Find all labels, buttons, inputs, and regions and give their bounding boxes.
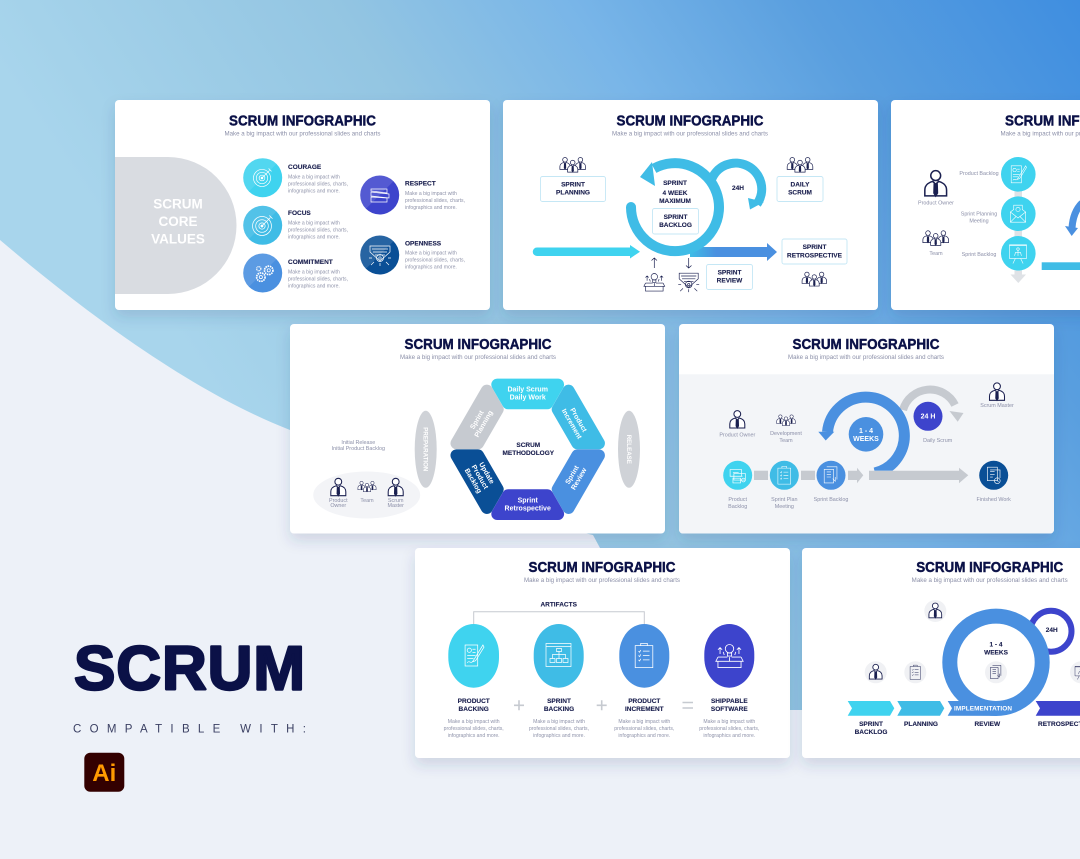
- step labels: SPRINT: [859, 721, 883, 728]
- artifact: shippable software: Make a big impact with: [703, 719, 755, 725]
- artifact: product backing: [444, 624, 504, 739]
- label: sprint review: Review: [570, 467, 589, 491]
- sprint planning box: SPRINT: [561, 182, 585, 188]
- artifact: shippable software: SHIPPABLE: [711, 698, 748, 705]
- roles ellipse: [313, 472, 420, 518]
- scrum master: [980, 383, 1014, 409]
- arrow: gray long: [869, 468, 968, 483]
- value: respect: infographics and more.: [405, 205, 457, 211]
- chevron: sprint backlog: [848, 701, 894, 716]
- value: commitment: professional slides, charts,: [288, 277, 348, 283]
- step: sprint backlog: [814, 461, 848, 503]
- sprint backlog box: SPRINT: [664, 214, 687, 221]
- subtitle: Make a big impact with our professional slides and charts: [788, 354, 944, 361]
- 24h circle: [914, 402, 942, 431]
- sprint retrospective box: [782, 239, 847, 264]
- daily scrum label: Daily Scrum: [923, 438, 953, 444]
- team: [923, 231, 949, 257]
- title: SCRUM INFOGRAPHIC: [616, 114, 764, 130]
- label: sprint retrospective: Retrospective: [505, 505, 551, 512]
- value: openness: professional slides, charts,: [405, 258, 465, 264]
- subtitle: Make a big impact with our professional slides and charts: [224, 130, 380, 138]
- artifact: product backing: Make a big impact with: [448, 719, 500, 725]
- panel: roles and flow, cropped: [891, 100, 1080, 310]
- roles ellipse: Product: [329, 498, 348, 504]
- 24h circle: 24 H: [921, 414, 935, 421]
- icon: team: [802, 272, 827, 286]
- daily scrum box: [777, 176, 823, 202]
- step: sprint planning meeting: [961, 196, 1036, 231]
- title: SCRUM INFOGRAPHIC: [229, 114, 376, 130]
- value: focus: professional slides, charts,: [288, 228, 348, 234]
- sprint review box: [706, 264, 752, 290]
- product owner: Product Owner: [918, 201, 954, 207]
- product owner: [918, 171, 954, 207]
- arrow: output blue: [690, 243, 777, 261]
- step: sprint backlog: [962, 236, 1036, 271]
- value: focus: FOCUS: [288, 210, 311, 217]
- artifact: shippable software: [699, 624, 759, 739]
- team: Team: [929, 251, 943, 257]
- segment: sprint planning: [456, 391, 503, 453]
- artifact: sprint backing: professional slides, charts,: [529, 726, 589, 732]
- artifact: sprint backing: SPRINT: [547, 698, 571, 705]
- plus sign: [514, 700, 524, 710]
- artifact: product backing: infographics and more.: [448, 733, 500, 739]
- arrow: cyan bar: [1042, 262, 1080, 270]
- sprint label: SPRINT: [663, 180, 687, 187]
- sprint planning box: PLANNING: [556, 190, 590, 197]
- sprint retrospective box: RETROSPECTIVE: [787, 252, 843, 259]
- step: sprint plan meeting: Sprint Plan: [771, 497, 797, 503]
- 24h label: 24H: [732, 185, 744, 192]
- connector arrows: [754, 468, 863, 483]
- step: finished work: [977, 461, 1011, 503]
- weeks circle: WEEKS: [853, 436, 879, 443]
- sprint planning box: [540, 176, 606, 202]
- panel: scrum methodology hexagon: [290, 324, 665, 534]
- sprint backlog box: [652, 208, 698, 234]
- artifact: shippable software: professional slides, charts,: [699, 726, 759, 732]
- segment: daily scrum: [497, 385, 558, 403]
- icon: team: [787, 157, 813, 172]
- value: courage: [243, 158, 348, 197]
- sprint label: [659, 180, 691, 205]
- artifact: product increment: Make a big impact with: [618, 719, 670, 725]
- label: sprint review: Sprint: [565, 464, 581, 486]
- step: product backlog: Backlog: [728, 504, 747, 510]
- connectors: [1014, 190, 1022, 238]
- value: respect: professional slides, charts,: [405, 198, 465, 204]
- arrow: gray down: [1010, 270, 1026, 283]
- center label: SCRUM: [516, 442, 540, 449]
- artifact: sprint backing: infographics and more.: [533, 733, 585, 739]
- sprint backlog box: BACKLOG: [659, 222, 692, 229]
- core values half circle: VALUES: [151, 232, 205, 246]
- value: courage: COURAGE: [288, 164, 322, 171]
- step: sprint planning meeting: Sprint Planning: [961, 212, 997, 218]
- value: openness: infographics and more.: [405, 265, 457, 271]
- segment: update product backlog: [456, 446, 503, 508]
- value: commitment: [243, 253, 348, 292]
- artifacts bracket: ARTIFACTS: [540, 602, 578, 608]
- release ellipse: [618, 411, 640, 488]
- background light curved area: [0, 240, 1080, 859]
- panel: sprint flow: [679, 324, 1054, 534]
- title: SCRUM INFOGRAPHIC: [792, 337, 940, 353]
- value: openness: OPENNESS: [405, 240, 442, 248]
- sprint review box: SPRINT: [718, 270, 741, 277]
- icon bubble: owner: [924, 600, 946, 622]
- chevron: planning: [897, 701, 944, 716]
- value: courage: infographics and more.: [288, 189, 340, 195]
- sprint retrospective box: SPRINT: [803, 244, 826, 251]
- 24h ring: 24H: [1046, 627, 1058, 634]
- value: openness: [360, 235, 465, 274]
- product owner: [719, 411, 755, 439]
- icon: medal: [678, 273, 699, 292]
- step labels: BACKLOG: [855, 729, 887, 736]
- subtitle: Make a big impact with our professional slides and charts: [524, 577, 680, 584]
- release ellipse: RELEASE: [625, 435, 632, 464]
- artifact: product increment: infographics and more.: [618, 733, 670, 739]
- artifact: product backing: professional slides, charts,: [444, 726, 504, 732]
- icon: up arrow: [652, 258, 657, 268]
- icon: down arrow: [686, 258, 692, 268]
- label: product increment: Increment: [560, 408, 583, 441]
- daily scrum box: SCRUM: [788, 190, 812, 197]
- center label: METHODOLOGY: [502, 450, 555, 457]
- development team: Team: [779, 438, 793, 444]
- panel: scrum core values: [115, 100, 490, 310]
- step: finished work: Finished Work: [977, 497, 1011, 503]
- step: sprint backlog: Sprint Backlog: [814, 497, 848, 503]
- hexagon ring: [456, 385, 599, 514]
- panel: sprint cycle: [503, 100, 878, 310]
- value: focus: infographics and more.: [288, 235, 340, 241]
- core values half circle: [115, 157, 236, 294]
- artifact: product increment: professional slides, charts,: [614, 726, 674, 732]
- segment: sprint review: [552, 446, 599, 508]
- gray content area: [679, 374, 1054, 534]
- arrow: sprint circle: [626, 162, 719, 251]
- step: sprint plan meeting: [770, 461, 799, 510]
- icon bubble: clipboard: [904, 661, 926, 683]
- roles ellipse: Owner: [330, 503, 346, 509]
- value: courage: Make a big impact with: [288, 175, 340, 181]
- label: update product backlog: Update: [477, 461, 495, 485]
- arrow: gray 24h: [903, 390, 964, 422]
- value: openness: Make a big impact with: [405, 251, 457, 257]
- step: sprint backlog: Sprint Backlog: [962, 252, 996, 258]
- step: product backlog: Product: [728, 497, 747, 503]
- value: respect: Make a big impact with: [405, 191, 457, 197]
- scrum master: Scrum Master: [980, 403, 1014, 409]
- artifact: sprint backing: BACKING: [544, 706, 574, 713]
- development team: [770, 415, 802, 444]
- value: focus: Make a big impact with: [288, 221, 340, 227]
- arrow: input cyan: [533, 245, 640, 258]
- weeks circle: 1 - 4: [859, 428, 873, 435]
- weeks ring: [950, 616, 1042, 708]
- value: commitment: infographics and more.: [288, 284, 340, 290]
- core values half circle: CORE: [158, 214, 198, 229]
- chevron: retrospective: [1036, 701, 1080, 716]
- step: product backlog: [723, 461, 752, 510]
- label: sprint planning: Planning: [474, 410, 495, 439]
- arrow: blue weeks: [818, 397, 904, 473]
- heading: SCRUM: SCRUM: [74, 634, 305, 704]
- value: commitment: Make a big impact with: [288, 270, 340, 276]
- artifact: product increment: INCREMENT: [625, 706, 664, 713]
- chevron: implementation: [948, 701, 996, 716]
- artifact: sprint backing: [529, 624, 589, 739]
- initial release text: Initial Release: [341, 440, 375, 446]
- daily scrum box: DAILY: [791, 182, 810, 188]
- artifact: shippable software: SOFTWARE: [711, 706, 748, 713]
- text: compatible with: COMPATIBLE WITH:: [73, 724, 306, 736]
- preparation ellipse: [415, 411, 437, 488]
- sprint label: MAXIMUM: [659, 198, 691, 205]
- step: sprint plan meeting: Meeting: [775, 504, 794, 510]
- implementation label: IMPLEMENTATION: [954, 706, 1012, 713]
- segment: product increment: [552, 391, 599, 453]
- weeks ring: WEEKS: [984, 650, 1009, 656]
- step: product backlog: [959, 157, 1036, 192]
- label: update product backlog: Backlog: [463, 468, 482, 495]
- sprint label: 4 WEEK: [663, 190, 688, 197]
- initial release text: Initial Product Backlog: [332, 446, 385, 452]
- segment: sprint retrospective: [497, 495, 558, 514]
- panel: implementation timeline, cropped: [802, 548, 1080, 758]
- sprint review box: REVIEW: [717, 278, 743, 285]
- equals sign: [682, 702, 693, 708]
- label: sprint planning: Sprint: [469, 409, 486, 431]
- subtitle: Make a big impact with our professional slides and charts: [400, 354, 556, 361]
- step: sprint planning meeting: Meeting: [969, 219, 989, 225]
- label: daily scrum: Daily Scrum: [507, 387, 548, 394]
- icon: Adobe Illustrator: Ai: [92, 760, 116, 787]
- value: commitment: COMMITMENT: [288, 259, 333, 266]
- roles ellipse: Scrum: [388, 498, 404, 504]
- artifact: product backing: PRODUCT: [458, 698, 490, 705]
- 24h ring: [1030, 611, 1072, 652]
- arrow: 24h loop: [711, 163, 764, 210]
- arrow: blue curved: [1065, 203, 1080, 236]
- weeks ring: 1 - 4: [989, 642, 1003, 648]
- value: courage: professional slides, charts,: [288, 182, 348, 188]
- plus sign: [597, 700, 607, 710]
- development team: Development: [770, 431, 802, 437]
- artifact: product increment: PRODUCT: [628, 698, 660, 705]
- label: update product backlog: Product: [470, 464, 489, 491]
- value: focus: [243, 206, 348, 245]
- weeks circle: [849, 417, 883, 452]
- value: respect: [360, 175, 465, 214]
- artifact: shippable software: infographics and more.: [703, 733, 755, 739]
- artifacts bracket: [474, 602, 644, 624]
- step labels: [855, 721, 1080, 736]
- preparation ellipse: PREPARATION: [422, 427, 428, 472]
- product owner: Product Owner: [719, 433, 755, 439]
- label: sprint retrospective: Sprint: [518, 498, 538, 504]
- step labels: REVIEW: [974, 721, 1001, 728]
- icon bubble: right cropped: [1070, 661, 1080, 683]
- roles ellipse: Master: [387, 503, 404, 509]
- title: SCRUM INFOGRAPHIC: [528, 560, 676, 576]
- subtitle: Make a big impact with our professional slides and charts: [912, 577, 1068, 584]
- artifact: sprint backing: Make a big impact with: [533, 719, 585, 725]
- panel: artifacts: [415, 548, 790, 758]
- artifact: product backing: BACKING: [459, 706, 489, 713]
- value: respect: RESPECT: [405, 180, 436, 188]
- label: daily scrum: Daily Work: [510, 394, 546, 401]
- roles ellipse: Team: [360, 498, 374, 504]
- icon: Adobe Illustrator: [84, 753, 124, 792]
- icon: team: [560, 157, 586, 172]
- center label: [502, 442, 555, 457]
- core values half circle: SCRUM: [153, 196, 203, 212]
- icon bubble: document: [985, 661, 1007, 683]
- title: SCRUM INFOGRAPHIC: [916, 560, 1064, 576]
- step: product backlog: Product Backlog: [959, 171, 999, 177]
- title: SCRUM INFOGRAPHIC: [404, 337, 552, 353]
- icon: product box: [644, 274, 665, 291]
- subtitle: Make a big impact with our professional slides and charts: [612, 130, 768, 138]
- initial release text: [332, 440, 385, 452]
- icon bubble: person: [865, 661, 887, 683]
- label: product increment: Product: [568, 407, 588, 434]
- step labels: PLANNING: [904, 721, 938, 728]
- artifact: product increment: [614, 624, 674, 739]
